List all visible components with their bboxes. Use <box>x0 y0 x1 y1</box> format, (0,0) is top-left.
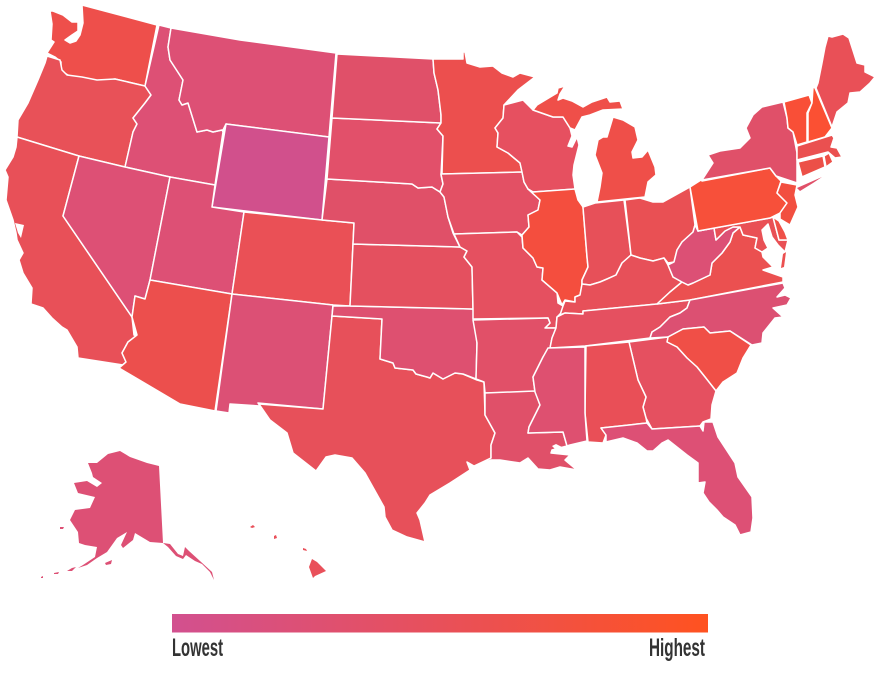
state: Ohio <box>625 187 695 263</box>
state: Rhode Island <box>824 153 833 167</box>
state: Nevada <box>63 156 170 317</box>
state: Massachusetts <box>797 135 842 160</box>
state: California <box>5 137 137 365</box>
state: Wisconsin <box>495 100 579 192</box>
state: Pennsylvania <box>690 168 787 231</box>
state: Texas <box>259 316 495 542</box>
San Francisco bay notch <box>15 223 24 238</box>
state: Washington <box>47 5 157 86</box>
state: Colorado <box>232 212 354 306</box>
state: Vermont <box>784 95 812 145</box>
state: Maryland <box>698 217 788 252</box>
icon: Hawaii <box>250 525 326 578</box>
Kauai <box>250 525 255 528</box>
legend label: highest: Highest <box>649 634 705 662</box>
state: Georgia <box>629 337 716 429</box>
state: Virginia <box>657 227 783 304</box>
Oahu <box>274 535 277 539</box>
Lake Pontchartrain <box>552 444 570 453</box>
state: Utah <box>150 177 244 294</box>
state: Indiana <box>582 200 631 285</box>
state: Virginia eastern shore <box>781 252 786 268</box>
state: Delaware <box>773 217 788 240</box>
state: Michigan upper peninsula <box>533 86 623 130</box>
state: New York <box>702 102 797 183</box>
state: Idaho <box>125 25 223 185</box>
state: Kentucky <box>560 255 682 315</box>
state: Minnesota <box>433 52 535 174</box>
map of the contiguous states <box>5 5 875 542</box>
Kodiak island <box>105 560 112 565</box>
state: West Virginia <box>668 225 740 285</box>
state: Mississippi <box>528 347 587 446</box>
Nunivak island <box>60 527 64 529</box>
icon: Alaska <box>41 451 214 580</box>
white water details <box>15 223 570 453</box>
Alaska panhandle <box>163 543 214 580</box>
state: Kansas <box>350 244 473 309</box>
Maui <box>303 548 307 551</box>
state: New Mexico <box>216 294 333 413</box>
legend label: lowest: Lowest <box>172 634 223 662</box>
state: New Hampshire <box>808 87 832 142</box>
state: Long Island <box>797 177 822 191</box>
state: Michigan lower peninsula <box>595 117 656 202</box>
state: Louisiana <box>473 391 577 470</box>
state: Alabama <box>585 342 647 443</box>
Aleutian islands west <box>54 572 59 574</box>
state: New Jersey <box>777 182 798 225</box>
state: Connecticut <box>798 156 825 177</box>
Aleutian far west <box>41 576 43 578</box>
state: Oregon <box>17 56 151 167</box>
state: Illinois <box>522 189 588 305</box>
state: Arkansas <box>473 318 556 393</box>
state: South Carolina <box>667 327 751 391</box>
legend gradient bar <box>172 614 708 632</box>
state: Arizona <box>119 280 232 411</box>
state: Nebraska <box>322 179 460 247</box>
state: South Dakota <box>327 118 443 192</box>
state: North Dakota <box>332 54 441 123</box>
state: Maine <box>816 34 875 127</box>
legend <box>172 614 708 662</box>
state: Florida <box>601 422 753 535</box>
state: Missouri <box>454 232 563 328</box>
Aleutian islands <box>67 567 76 571</box>
state: Montana <box>168 28 336 137</box>
state: North Carolina <box>650 283 791 345</box>
state: Tennessee <box>550 300 690 348</box>
state: Wyoming <box>212 124 329 220</box>
state: Iowa <box>440 172 540 235</box>
state: Oklahoma <box>332 306 477 379</box>
